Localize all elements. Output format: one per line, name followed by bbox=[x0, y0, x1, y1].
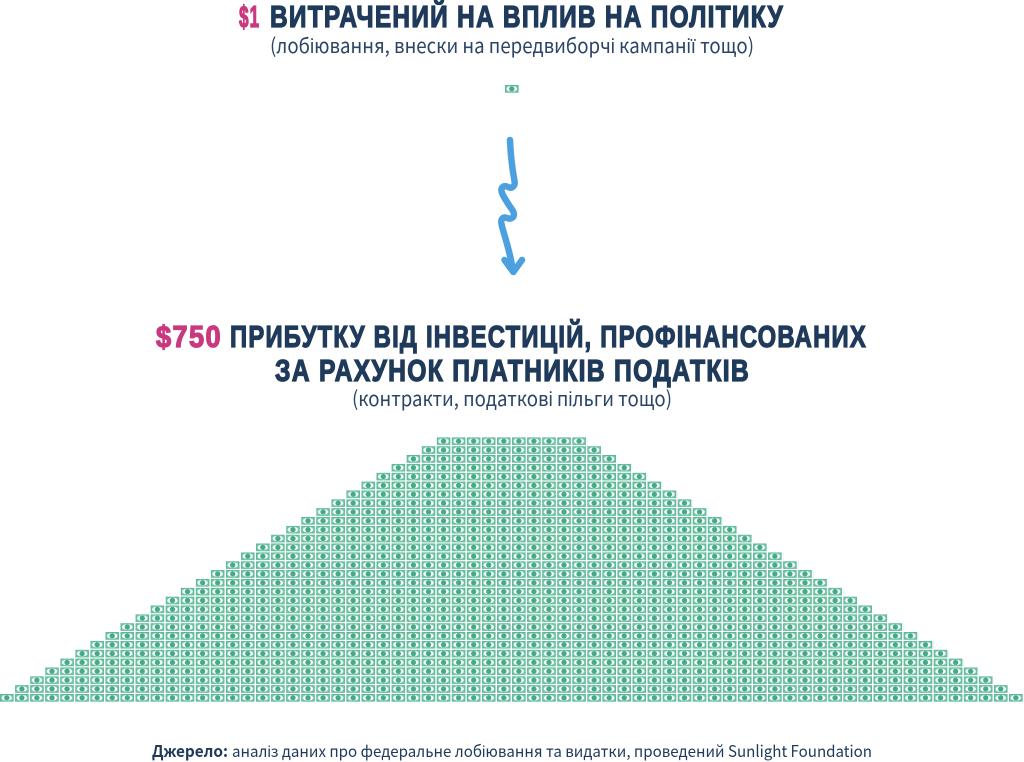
arrow: wavy blue arrow pointing down bbox=[501, 140, 522, 272]
heading: $1 spent on political influence: $1 bbox=[239, 0, 260, 34]
heading: $1 spent on political influence: ВИТРАЧЕНИЙ НА ВПЛИВ НА ПОЛІТИКУ bbox=[270, 0, 784, 34]
chart: pyramid of dollar bills bbox=[0, 437, 1024, 702]
subtitle: lobbying and campaign contributions: (лобіювання, внески на передвиборчі кампанії тощо) bbox=[270, 29, 754, 59]
heading: $750 return on taxpayer-funded investments bbox=[156, 318, 867, 388]
heading: $750 return on taxpayer-funded investments: ЗА РАХУНОК ПЛАТНИКІВ ПОДАТКІВ bbox=[275, 353, 750, 388]
icon: single dollar bill bbox=[506, 86, 518, 92]
subtitle: contracts and tax breaks: (контракти, податкові пільги тощо) bbox=[352, 382, 672, 412]
source note: аналіз даних про федеральне лобіювання та видатки, проведений Sunlight Foundation bbox=[232, 738, 872, 762]
source note: Джерело: bbox=[152, 738, 228, 762]
heading: $750 return on taxpayer-funded investments: $750 bbox=[156, 319, 222, 354]
